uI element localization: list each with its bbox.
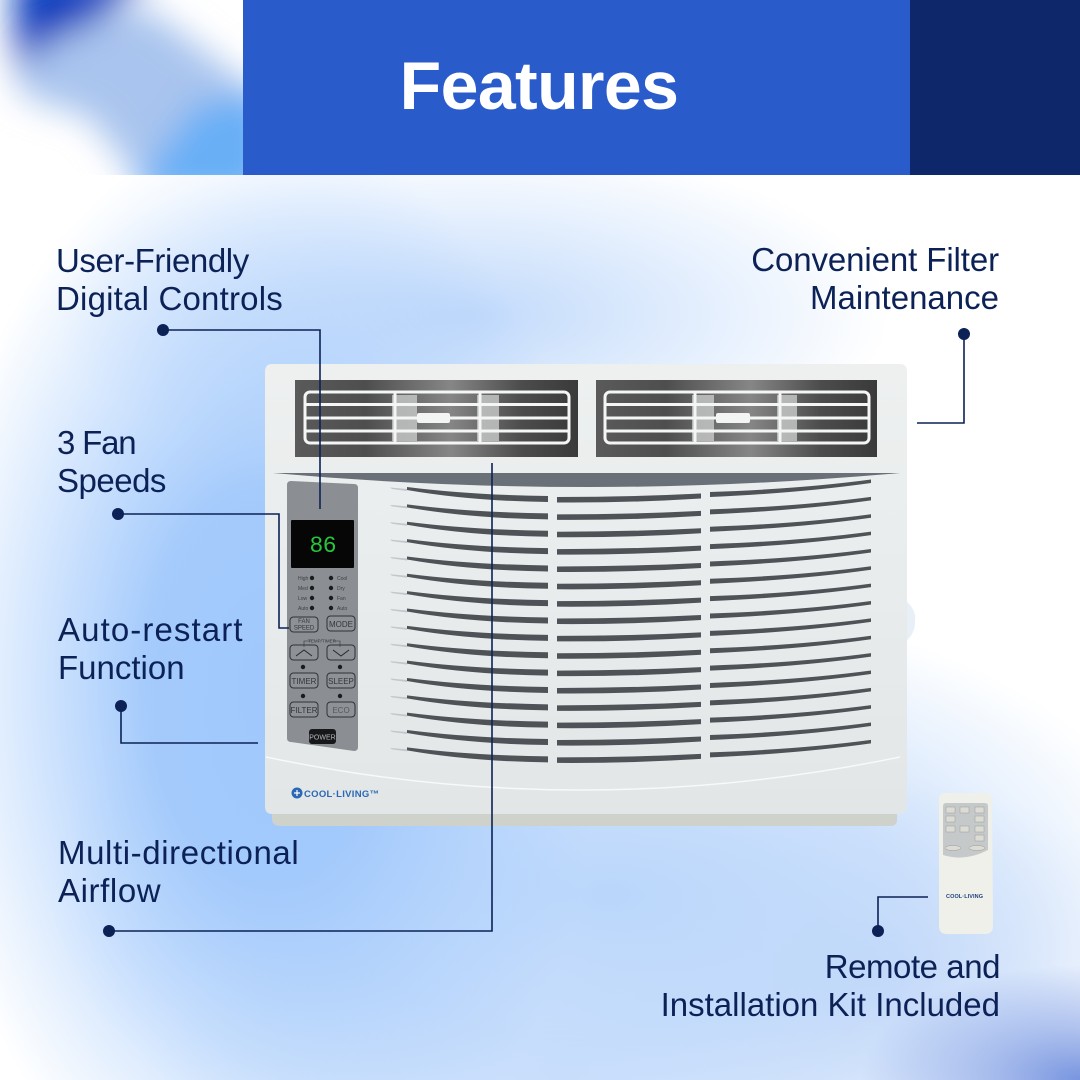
panel buttons: FAN bbox=[298, 619, 310, 625]
panel buttons: FILTER bbox=[291, 706, 318, 715]
label: user-friendly digital controls bbox=[56, 242, 283, 317]
label: multi-directional airflow: Multi-directional bbox=[58, 834, 299, 871]
speed and mode indicators: Auto bbox=[337, 606, 348, 612]
speed and mode indicators: Fan bbox=[337, 596, 346, 602]
side knob bbox=[905, 600, 915, 642]
leader: fan speeds bbox=[118, 514, 289, 628]
front louvres bbox=[390, 480, 871, 763]
leader: auto-restart bbox=[121, 706, 258, 743]
leader: airflow bbox=[109, 463, 492, 931]
speed and mode indicators: Cool bbox=[337, 576, 347, 582]
label: remote and installation kit: Remote and bbox=[825, 948, 1000, 985]
speed and mode indicators: Low bbox=[298, 596, 308, 602]
brand logo: COOL·LIVING™ bbox=[304, 789, 379, 800]
label: remote and installation kit bbox=[661, 948, 1000, 1022]
bottom tray bbox=[272, 810, 897, 826]
top vent recess left bbox=[295, 380, 578, 457]
leader: digital controls bbox=[163, 330, 320, 509]
label: convenient filter maintenance bbox=[751, 241, 999, 316]
control panel bbox=[287, 481, 358, 751]
label: user-friendly digital controls: User-Friendly bbox=[56, 242, 249, 279]
leader: remote bbox=[878, 897, 928, 931]
power button bbox=[309, 729, 336, 744]
grille left bbox=[305, 392, 569, 443]
vent baffles bbox=[392, 395, 797, 441]
title: Features bbox=[400, 48, 678, 124]
speed and mode indicators bbox=[298, 576, 348, 698]
label: multi-directional airflow: Airflow bbox=[58, 872, 161, 908]
remote logo: COOL·LIVING bbox=[946, 894, 983, 900]
speed and mode indicators: High bbox=[298, 576, 309, 582]
leader: filter bbox=[917, 334, 964, 423]
speed and mode indicators: Med bbox=[298, 586, 308, 592]
control panel: POWER bbox=[309, 734, 336, 742]
remote key panel bbox=[943, 803, 988, 858]
speed and mode indicators: Dry bbox=[337, 586, 345, 592]
top vent recess right bbox=[596, 380, 877, 457]
header: navy block bbox=[910, 0, 1080, 175]
grille right bbox=[605, 392, 869, 443]
panel buttons bbox=[290, 616, 355, 717]
panel buttons: MODE bbox=[329, 620, 353, 629]
remote keys bbox=[945, 807, 985, 850]
digital display bbox=[291, 520, 354, 568]
label: multi-directional airflow bbox=[58, 834, 299, 908]
label: remote and installation kit: Installation Kit Included bbox=[661, 986, 1000, 1022]
gray band under vents bbox=[273, 473, 900, 487]
remote control bbox=[939, 793, 993, 934]
label: convenient filter maintenance: Convenient Filter bbox=[751, 241, 999, 278]
label: 3 fan speeds: Speeds bbox=[57, 462, 166, 498]
panel buttons: TEMP/TIMER bbox=[308, 638, 337, 644]
leader dots bbox=[103, 324, 970, 937]
panel buttons: SPEED bbox=[294, 626, 315, 632]
panel buttons: ECO bbox=[332, 706, 350, 715]
label: user-friendly digital controls: Digital Controls bbox=[56, 280, 283, 316]
panel buttons: SLEEP bbox=[328, 677, 354, 686]
label: 3 fan speeds bbox=[57, 424, 166, 499]
header: blue title band bbox=[243, 0, 910, 175]
AC body bbox=[265, 364, 907, 814]
label: convenient filter maintenance: Maintenance bbox=[810, 278, 999, 316]
lower curved seam bbox=[266, 757, 900, 790]
label: auto-restart function: Function bbox=[58, 648, 185, 686]
panel buttons: TIMER bbox=[292, 677, 317, 686]
speed and mode indicators: Auto bbox=[298, 606, 309, 612]
vent handles bbox=[417, 413, 750, 423]
header: left gradient image bbox=[0, 0, 243, 175]
display digits: 86 bbox=[310, 533, 336, 559]
label: auto-restart function bbox=[58, 611, 244, 686]
label: 3 fan speeds: 3 Fan bbox=[57, 424, 135, 461]
label: auto-restart function: Auto-restart bbox=[58, 611, 244, 648]
